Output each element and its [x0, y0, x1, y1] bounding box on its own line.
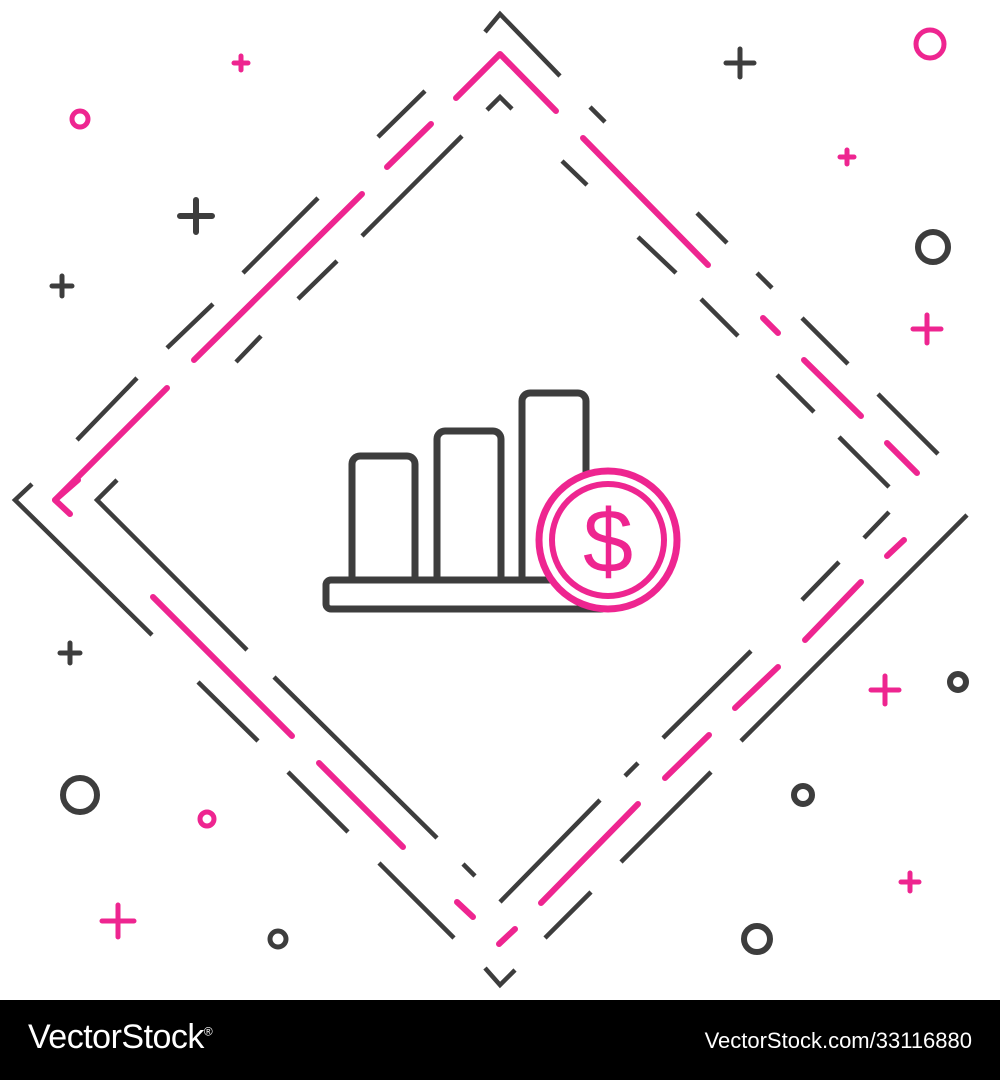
footer logo text: VectorStock®	[28, 1018, 212, 1056]
icon: dollar coin	[539, 471, 677, 609]
footer url text: VectorStock.com/33116880	[705, 1028, 972, 1053]
icon: bar chart with coin	[326, 393, 677, 609]
decorative pluses and rings	[52, 30, 966, 952]
icon: dollar coin: $	[583, 492, 633, 592]
diamond frame: pink dashes	[55, 54, 917, 944]
footer bar	[0, 1000, 1000, 1080]
